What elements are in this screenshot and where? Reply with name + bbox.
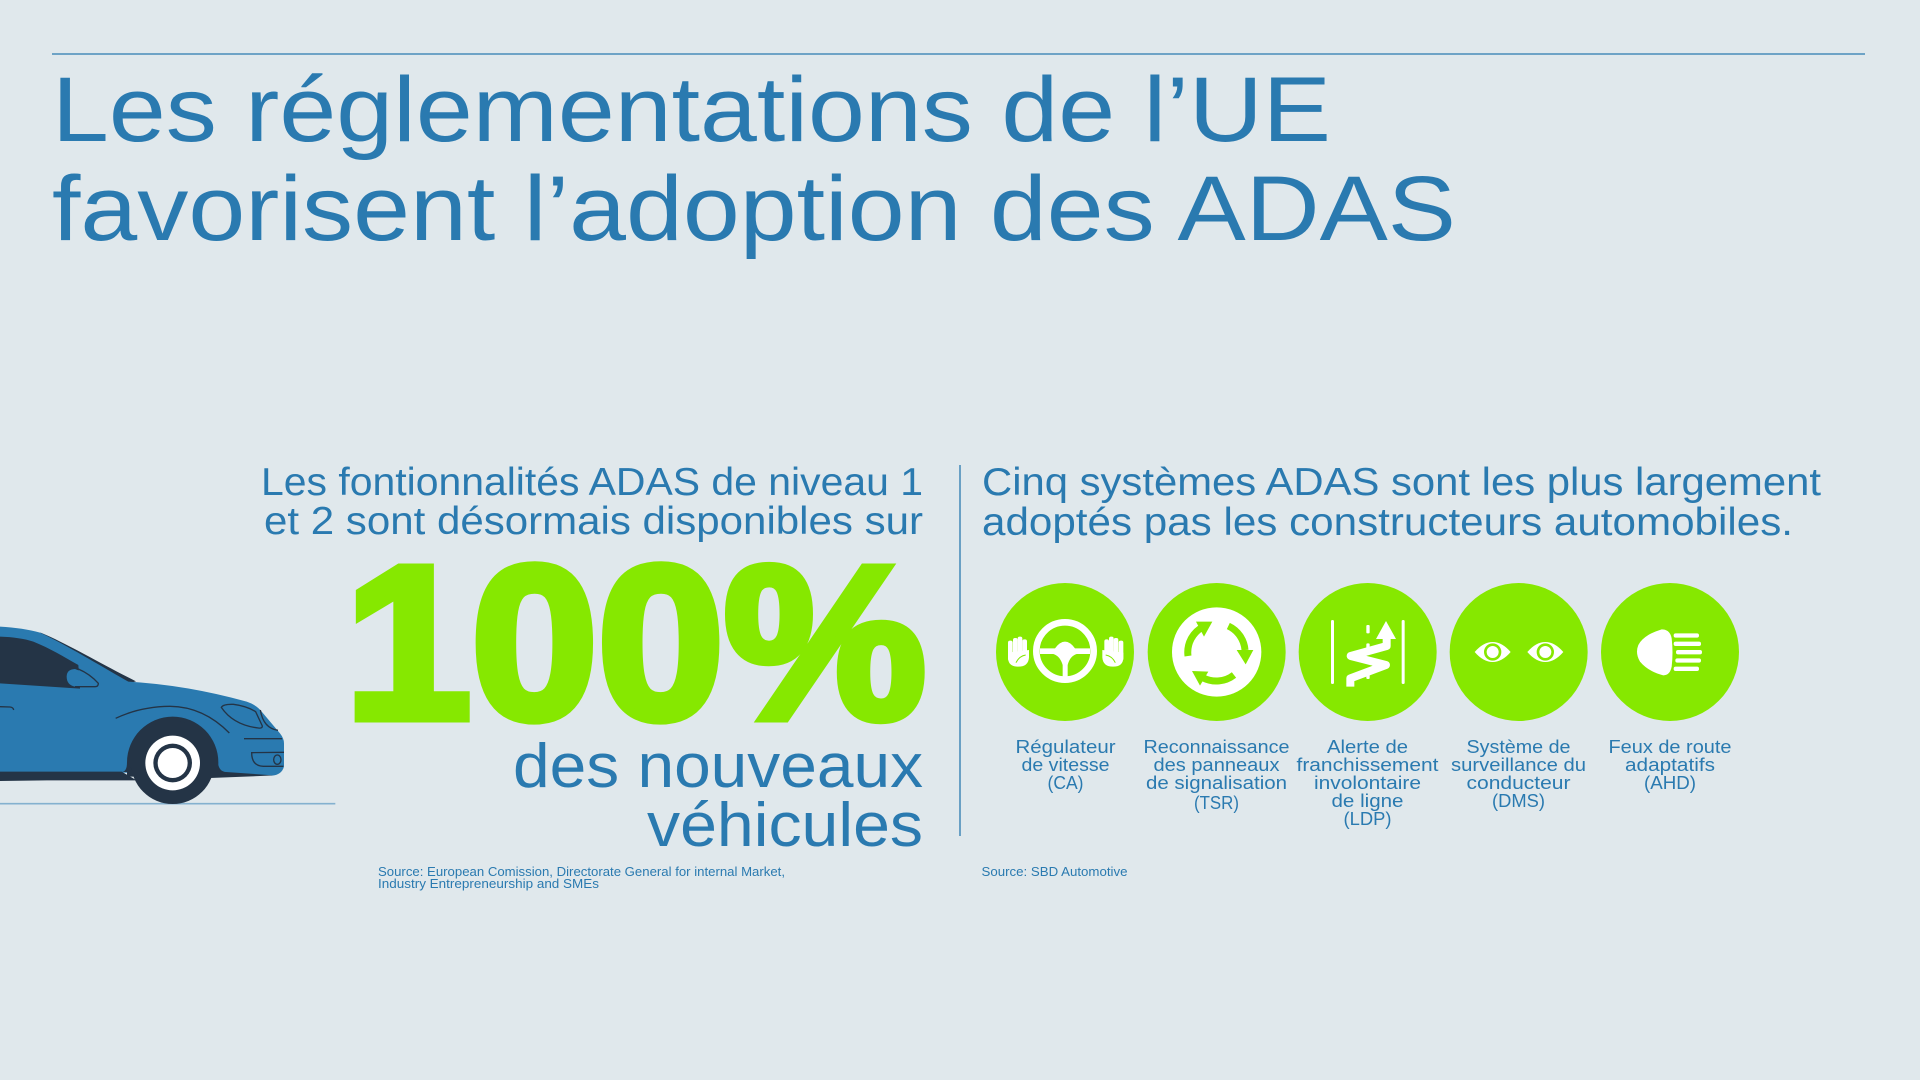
intro text: level 1 and 2 ADAS: et 2 sont désormais disponibles sur bbox=[264, 500, 923, 543]
label: alerte de franchissement: Alerte de bbox=[1327, 737, 1408, 757]
label: feux de route adaptatifs: Feux de route bbox=[1608, 737, 1732, 757]
source: right: Source: SBD Automotive bbox=[982, 864, 1128, 879]
source: left: Source: European Comission, Directorate General for internal Market, bbox=[378, 864, 785, 879]
body lines and headlight bbox=[0, 704, 284, 766]
title bbox=[52, 59, 1456, 260]
big number: 100%: 100% bbox=[345, 522, 926, 765]
icon: lane departure warning bbox=[1299, 583, 1437, 721]
title: Les réglementations de l’UE bbox=[52, 59, 1331, 161]
label: régulateur de vitesse: de vitesse bbox=[1022, 755, 1110, 775]
intro text: level 1 and 2 ADAS: Les fontionnalités ADAS de niveau 1 bbox=[261, 461, 923, 504]
text: des nouveaux véhicules bbox=[513, 732, 923, 860]
label: reconnaissance des panneaux: (TSR) bbox=[1194, 793, 1239, 813]
label: reconnaissance des panneaux: de signalisation bbox=[1146, 773, 1287, 793]
label: régulateur de vitesse: (CA) bbox=[1048, 773, 1084, 793]
wing mirror bbox=[67, 669, 98, 687]
label: reconnaissance des panneaux: Reconnaissance bbox=[1144, 737, 1290, 757]
label: système de surveillance: Système de bbox=[1466, 737, 1570, 757]
icon: steering wheel and hands bbox=[996, 583, 1134, 721]
source: left: Industry Entrepreneurship and SMEs bbox=[378, 876, 600, 891]
text: des nouveaux véhicules: des nouveaux bbox=[513, 732, 923, 801]
icon: driver monitoring eyes bbox=[1450, 583, 1588, 721]
label: régulateur de vitesse bbox=[1016, 737, 1116, 793]
source: left bbox=[378, 864, 785, 891]
illustration: blue car bbox=[0, 627, 335, 804]
label: système de surveillance: (DMS) bbox=[1492, 791, 1545, 811]
label: reconnaissance des panneaux bbox=[1144, 737, 1290, 813]
label: feux de route adaptatifs: adaptatifs bbox=[1625, 755, 1715, 775]
label: alerte de franchissement bbox=[1296, 737, 1438, 829]
front wheel bbox=[131, 721, 214, 804]
label: feux de route adaptatifs: (AHD) bbox=[1644, 773, 1696, 793]
label: reconnaissance des panneaux: des panneaux bbox=[1154, 755, 1280, 775]
label: alerte de franchissement: (LDP) bbox=[1344, 809, 1392, 829]
label: système de surveillance: surveillance du bbox=[1451, 755, 1586, 775]
intro text: five ADAS systems: adoptés pas les constructeurs automobiles. bbox=[982, 501, 1793, 544]
label: alerte de franchissement: involontaire bbox=[1314, 773, 1421, 793]
text: des nouveaux véhicules: véhicules bbox=[647, 791, 923, 860]
icon: adaptive headlamp bbox=[1601, 583, 1739, 721]
intro text: five ADAS systems: Cinq systèmes ADAS sont les plus largement bbox=[982, 461, 1821, 504]
icon: roundabout traffic sign bbox=[1148, 583, 1286, 721]
intro text: five ADAS systems bbox=[982, 461, 1821, 544]
label: système de surveillance: conducteur bbox=[1466, 773, 1571, 793]
label: système de surveillance bbox=[1451, 737, 1586, 811]
intro text: level 1 and 2 ADAS bbox=[261, 461, 923, 543]
label: alerte de franchissement: franchissement bbox=[1296, 755, 1438, 775]
label: feux de route adaptatifs bbox=[1608, 737, 1732, 793]
label: alerte de franchissement: de ligne bbox=[1332, 791, 1404, 811]
label: régulateur de vitesse: Régulateur bbox=[1016, 737, 1116, 757]
side window bbox=[0, 637, 80, 689]
title: favorisent l’adoption des ADAS bbox=[52, 158, 1456, 260]
